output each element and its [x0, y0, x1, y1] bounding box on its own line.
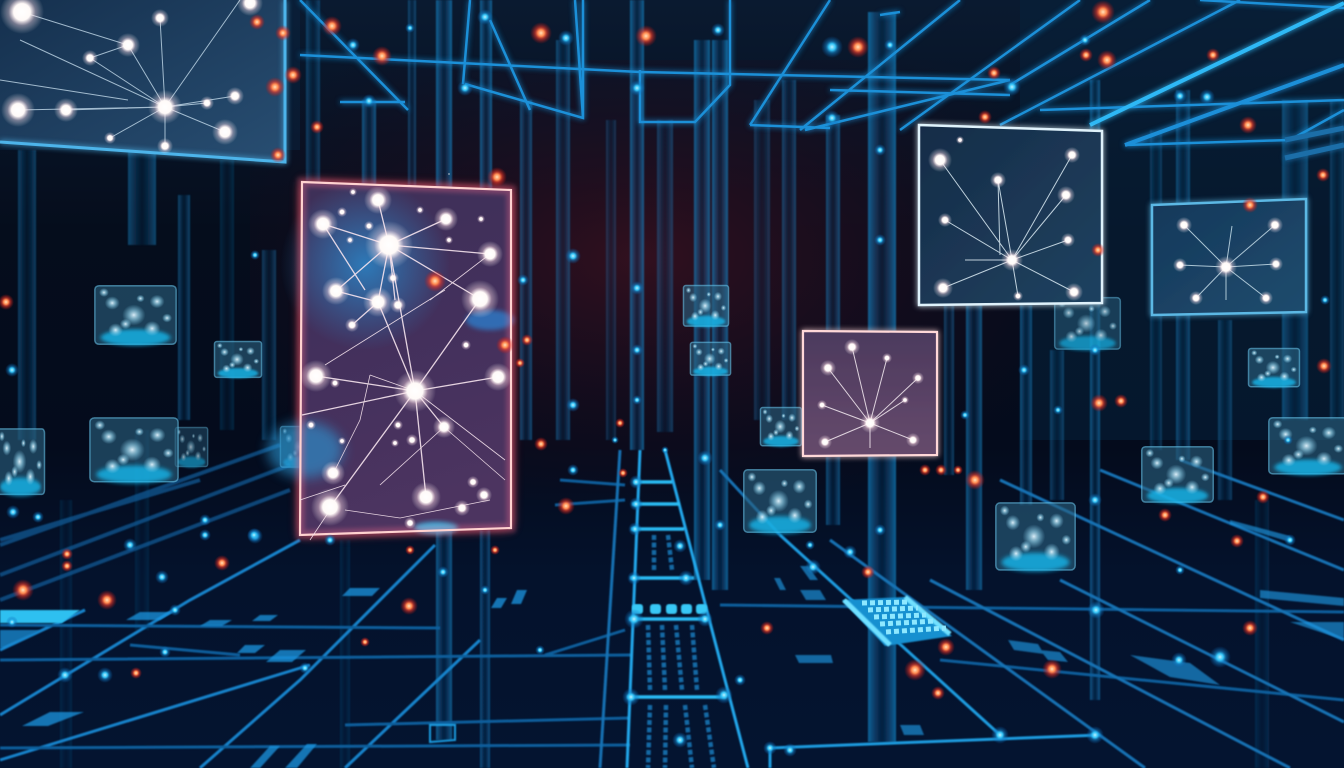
centre track data dashes	[648, 535, 714, 768]
panel: centre right pink network	[803, 331, 937, 456]
cube centre 4	[744, 470, 816, 534]
floor perspective grid	[0, 445, 1344, 768]
cube right 4	[1142, 447, 1213, 504]
cube left 2	[214, 341, 262, 378]
cube centre 2	[690, 342, 731, 376]
centre track cell row	[632, 604, 707, 614]
cube right 5	[1269, 418, 1344, 475]
cube left 6	[280, 427, 320, 468]
panel: large pink network	[267, 173, 514, 540]
cube left 4	[90, 418, 178, 483]
red nodes	[424, 270, 514, 354]
cube left 1	[95, 286, 176, 346]
network nodes	[817, 339, 924, 449]
network links	[940, 155, 1074, 296]
cube left 3	[0, 429, 45, 496]
floor keypad	[842, 597, 952, 646]
network nodes	[1173, 217, 1283, 305]
cube centre 3	[760, 407, 802, 447]
cube right 1	[996, 503, 1075, 572]
ceiling frame structure	[300, 0, 1344, 158]
network links	[300, 200, 505, 540]
network nodes	[928, 136, 1083, 301]
floor data blocks	[0, 520, 1344, 768]
network links	[822, 347, 918, 448]
cube left 5	[175, 428, 208, 468]
network links	[0, 0, 240, 146]
background glass cubes	[0, 286, 1344, 572]
network nodes	[300, 173, 512, 529]
cube right 2	[1055, 298, 1120, 350]
panel: far right network	[1152, 199, 1306, 315]
network links	[1180, 225, 1276, 300]
panel: top-left network	[0, 0, 285, 162]
cube right 3	[1249, 348, 1299, 388]
network nodes	[0, 0, 263, 154]
panel: upper right network	[919, 125, 1102, 305]
cube centre 1	[683, 286, 729, 327]
